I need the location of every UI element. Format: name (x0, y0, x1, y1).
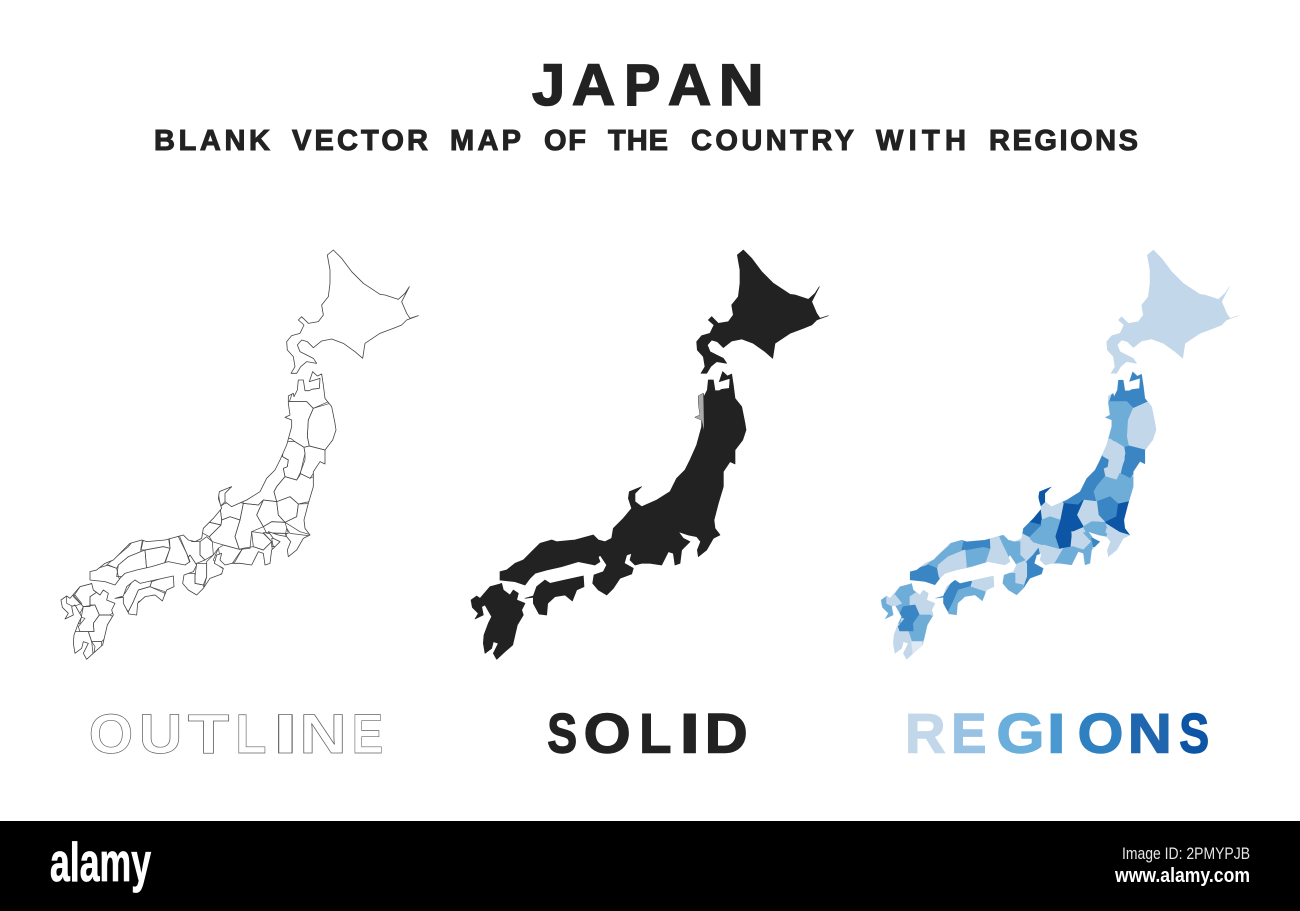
label: solid: S (547, 702, 577, 765)
label: regions: R (905, 702, 945, 764)
label: regions: N (1128, 703, 1172, 765)
label: outline: I (272, 703, 298, 765)
label: outline: E (352, 702, 383, 765)
label: regions: O (1078, 703, 1123, 765)
title: A (668, 54, 711, 118)
label: solid: I (680, 702, 700, 765)
label: outline: L (235, 704, 267, 766)
label: regions: E (951, 702, 986, 765)
subtitle: BLANK (154, 125, 270, 157)
label: regions (905, 702, 1209, 765)
label: outline (89, 702, 383, 766)
subtitle: MAP (450, 125, 521, 157)
logo: alamy: alamy (50, 831, 151, 893)
subtitle: REGIONS (989, 125, 1138, 157)
label: solid: O (584, 703, 631, 765)
label: regions: I (1047, 702, 1066, 765)
subtitle: COUNTRY (691, 125, 854, 157)
map: regions (878, 250, 1238, 663)
subtitle: WITH (876, 125, 966, 157)
title: N (719, 53, 764, 118)
title: J (532, 54, 565, 118)
label: regions: S (1179, 702, 1209, 765)
subtitle: OF (544, 125, 586, 157)
label: outline: O (89, 703, 133, 765)
title: P (624, 52, 660, 118)
title: A (572, 54, 615, 118)
image id: Image ID: 2PMYPJB (1122, 844, 1250, 863)
map: outline (58, 250, 418, 663)
label: solid: D (705, 703, 748, 765)
label: outline: T (188, 703, 229, 766)
website: www.alamy.com (1114, 865, 1250, 887)
subtitle: THE (608, 125, 668, 157)
label: outline: N (299, 702, 347, 765)
title (532, 52, 764, 118)
subtitle (154, 125, 1138, 157)
subtitle: VECTOR (292, 125, 428, 157)
label: outline: U (139, 703, 182, 765)
map: solid (471, 250, 828, 659)
label: solid: L (639, 702, 671, 765)
label: solid (547, 702, 748, 765)
label: regions: G (996, 703, 1044, 765)
footer bar (0, 821, 1300, 911)
